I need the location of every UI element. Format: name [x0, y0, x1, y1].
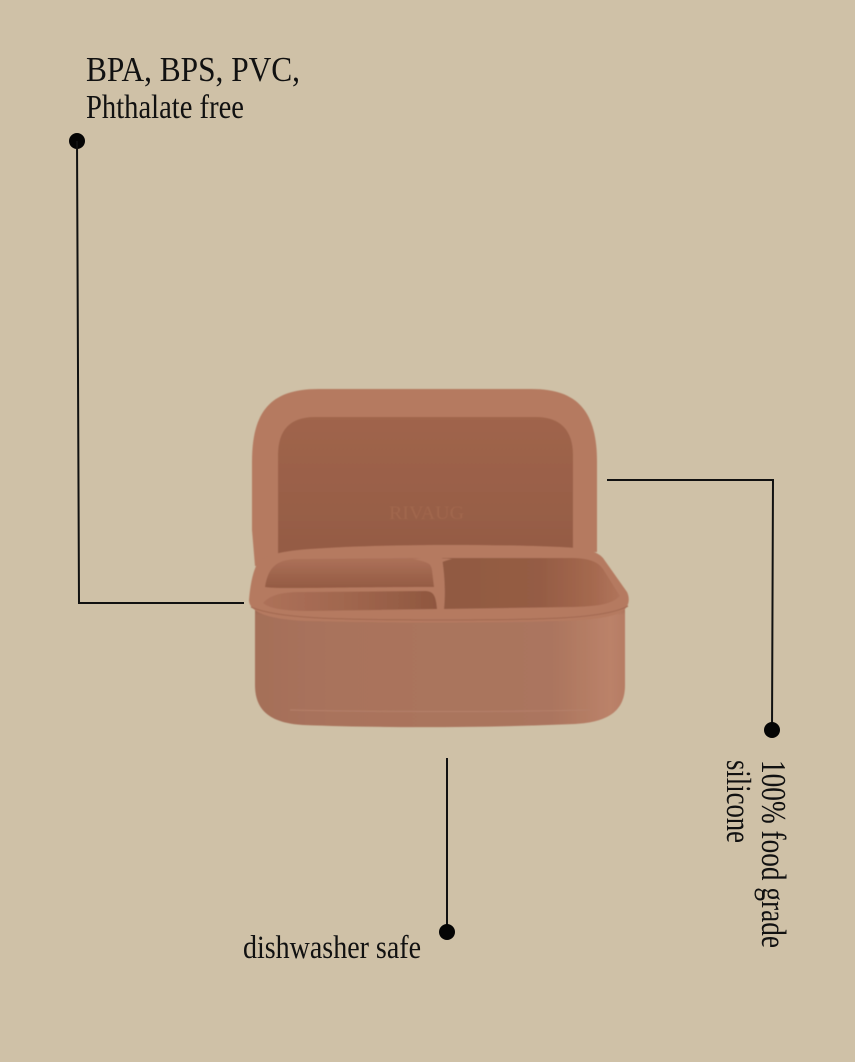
divider T top	[413, 558, 452, 567]
box rim	[249, 545, 629, 622]
body base line	[290, 710, 590, 712]
lid	[252, 389, 597, 566]
heading: BPA, BPS, PVC, Phthalate free: Phthalate free	[86, 89, 244, 126]
rim lower edge	[251, 606, 628, 620]
compartment: right	[442, 558, 620, 609]
callout line: left, to box rim	[69, 133, 244, 603]
label: 100% food grade silicone	[719, 760, 793, 948]
label: 100% food grade silicone: 100% food grade	[754, 760, 793, 948]
heading: BPA, BPS, PVC, Phthalate free	[86, 50, 300, 126]
box body	[255, 605, 625, 727]
label: 100% food grade silicone: silicone	[719, 760, 758, 843]
body shadow under rim	[255, 610, 625, 640]
callout line: right, from lid	[607, 480, 780, 738]
heading: BPA, BPS, PVC, Phthalate free: BPA, BPS, PVC,	[86, 50, 300, 89]
label: dishwasher safe: dishwasher safe	[243, 930, 421, 966]
product: silicone lunch box	[249, 389, 629, 727]
compartment: lower left	[263, 591, 437, 611]
lid logo: RIVAUG	[389, 503, 464, 524]
compartment: upper left	[265, 558, 434, 588]
callout line: bottom	[439, 758, 455, 940]
